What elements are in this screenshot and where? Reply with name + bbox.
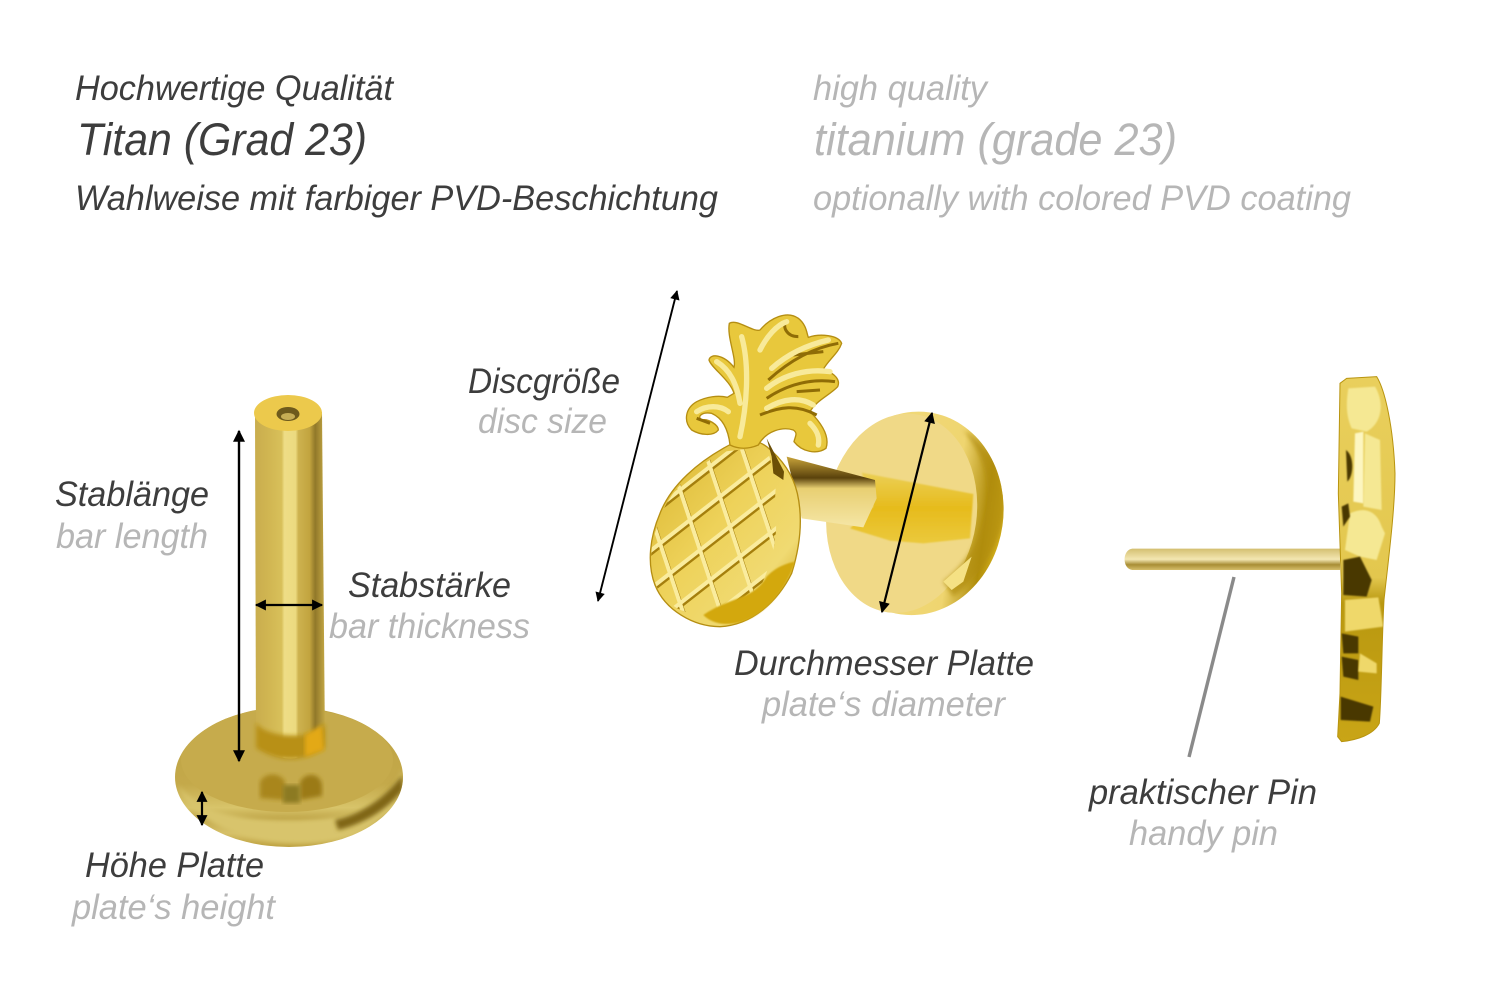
- arrow: bar thickness: [256, 604, 322, 606]
- label: bar length: bar length: [56, 517, 208, 556]
- label: plate diameter: [734, 644, 1034, 724]
- heading: English quality text: high quality: [813, 69, 989, 108]
- label: plate height: [71, 846, 276, 927]
- disc plate: [826, 412, 1004, 616]
- label: disc size: Discgröße: [468, 362, 620, 401]
- arrow: plate height: [201, 792, 203, 825]
- product: stud side view with pin: [1125, 377, 1395, 742]
- label: plate diameter: plate‘s diameter: [761, 685, 1006, 724]
- crown leaf details: [697, 320, 838, 423]
- pineapple lattice: [651, 449, 776, 612]
- arrow: plate diameter: [882, 413, 932, 612]
- arrow: disc size: [598, 291, 677, 601]
- product: threaded post with base plate: [175, 395, 403, 847]
- label: plate height: Höhe Platte: [85, 846, 264, 885]
- pineapple body: [650, 440, 800, 627]
- heading: English quality text: titanium (grade 23): [814, 114, 1177, 165]
- label: bar thickness: [329, 566, 530, 646]
- label: plate height: plate‘s height: [71, 888, 276, 927]
- post reflection on plate: [850, 473, 973, 543]
- pineapple side profile: [1338, 377, 1395, 742]
- label: bar length: Stablänge: [55, 475, 209, 514]
- label: bar thickness: bar thickness: [329, 607, 530, 646]
- heading: German quality text: [75, 69, 719, 218]
- heading: English quality text: [813, 69, 1352, 218]
- pineapple crown: [686, 315, 842, 452]
- label: plate diameter: Durchmesser Platte: [734, 644, 1034, 683]
- post: [787, 457, 877, 527]
- dark reflections: [1341, 450, 1373, 722]
- label: bar length: [55, 475, 209, 556]
- heading: German quality text: Hochwertige Qualität: [75, 69, 394, 108]
- heading: English quality text: optionally with colored PVD coating: [813, 179, 1352, 218]
- pale highlights: [1345, 387, 1385, 560]
- heading: German quality text: Titan (Grad 23): [77, 114, 367, 165]
- label: handy pin: handy pin: [1129, 814, 1278, 853]
- lower reflection on body: [703, 562, 795, 624]
- label: handy pin: praktischer Pin: [1088, 773, 1317, 812]
- label: disc size: disc size: [478, 402, 607, 441]
- lower pale facets: [1345, 597, 1383, 673]
- label: bar thickness: Stabstärke: [348, 566, 511, 605]
- product: pineapple stud: [650, 314, 1004, 628]
- label: disc size: [468, 362, 620, 441]
- pointer line: pin: [1189, 577, 1234, 757]
- arrow: bar length: [238, 431, 240, 761]
- pin: [1125, 549, 1340, 570]
- heading: German quality text: Wahlweise mit farbiger PVD-Beschichtung: [75, 179, 719, 218]
- label: handy pin: [1088, 773, 1317, 853]
- dark slot between body and crown: [767, 438, 784, 480]
